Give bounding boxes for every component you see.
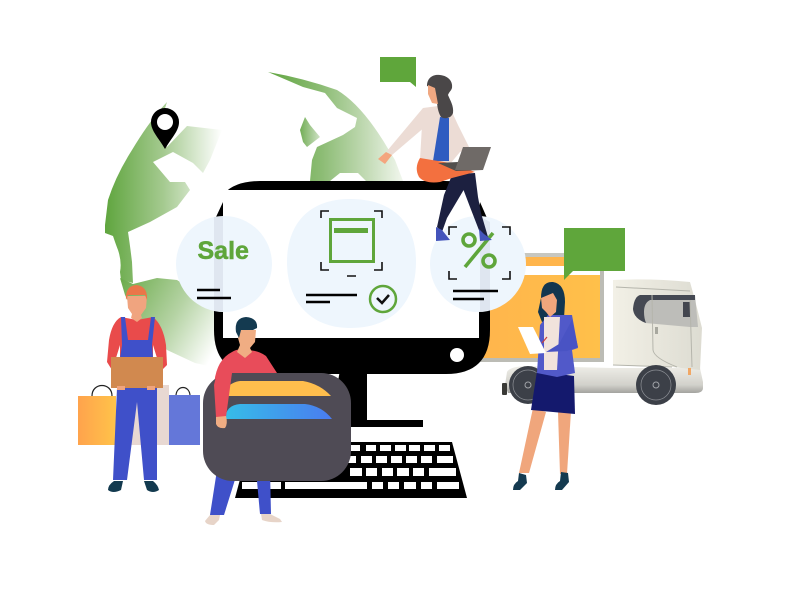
panel: window icon blob: [287, 199, 416, 328]
percent circle background: [430, 216, 526, 312]
delivery truck: [472, 253, 703, 405]
truck: chassis: [505, 366, 703, 393]
left shoe: [513, 473, 527, 490]
box: [111, 357, 163, 388]
globe: lower continent: [120, 278, 222, 369]
globe: island: [300, 117, 320, 147]
hands on box: [117, 386, 155, 390]
right leg: [558, 411, 571, 474]
wallet: blue card: [225, 404, 332, 419]
truck: rear wheel: [509, 366, 547, 404]
jacket: [537, 315, 578, 377]
bag: blue: [169, 388, 200, 445]
shirt: [107, 317, 167, 370]
pen: [542, 337, 547, 343]
keyboard: [235, 442, 467, 498]
left shoe: [205, 515, 220, 525]
monitor: frame: [214, 181, 490, 374]
globe: left continents: [105, 102, 222, 283]
arm over wallet: [214, 368, 232, 417]
keyboard: body: [235, 442, 467, 498]
truck: cargo top strip: [505, 257, 567, 266]
wallet: yellow card: [224, 381, 331, 396]
truck: tail light: [502, 383, 507, 395]
laptop screen: [455, 147, 491, 170]
truck: cargo box: [472, 275, 600, 358]
jacket arm: [546, 320, 578, 352]
globe: [105, 72, 403, 369]
bag: beige: [127, 385, 169, 445]
panel: percent circle: [430, 216, 526, 312]
icon: map pin: [151, 108, 179, 149]
truck: door lines: [613, 287, 692, 367]
legs: [113, 388, 157, 480]
sale circle over monitor edge: [214, 217, 223, 311]
blouse: [544, 317, 560, 370]
legs: [210, 470, 271, 515]
back hair: [538, 282, 565, 322]
speech bubble: top: [380, 57, 416, 87]
left shoe: [436, 227, 450, 241]
truck: window: [633, 295, 698, 327]
arm gaps: [116, 345, 157, 358]
hair: [236, 317, 257, 338]
percent circle over monitor edge: [480, 216, 490, 312]
globe: right continents: [268, 72, 403, 181]
jacket: [420, 106, 469, 164]
panel: sale circle: [176, 216, 272, 312]
hair: [427, 75, 453, 118]
truck: window dark frame: [633, 295, 695, 323]
right leg: [458, 173, 488, 238]
right shoe: [555, 472, 569, 490]
left shoe: [108, 481, 123, 492]
woman with document: [513, 282, 578, 490]
face: [428, 85, 438, 104]
sale circle background: [176, 216, 272, 312]
sale label: Sale: [198, 237, 249, 265]
left leg: [519, 408, 546, 473]
truck: mirror: [683, 302, 690, 317]
laptop base: [438, 162, 483, 171]
top: [433, 117, 449, 161]
icon: browser window: [330, 220, 374, 262]
blob background: [287, 199, 416, 328]
head: [127, 296, 147, 322]
monitor: upper right cut: [458, 178, 492, 218]
bag: orange: [78, 386, 116, 445]
monitor: stand: [330, 370, 423, 427]
icon: focus brackets: [321, 211, 382, 276]
skirt: [417, 158, 475, 182]
monitor: cut corner: [212, 179, 238, 217]
icon: percent sign: [463, 233, 495, 267]
icon: focus brackets: [449, 227, 510, 279]
text lines: [306, 295, 357, 302]
hand: [378, 152, 392, 164]
right shoe: [479, 229, 492, 241]
icon: check badge: [370, 286, 396, 312]
monitor: power button: [450, 348, 464, 362]
wallet: [203, 373, 351, 481]
left arm: [387, 108, 433, 155]
shirt: [214, 349, 277, 417]
woman sitting with laptop: [378, 75, 492, 241]
speech bubble: truck: [564, 228, 625, 280]
monitor: screen: [223, 190, 479, 338]
overalls: [120, 317, 155, 358]
sale text lines: [197, 290, 231, 298]
right shoe: [144, 481, 159, 492]
computer monitor: [212, 178, 492, 427]
truck: door handle: [655, 327, 658, 334]
document: [518, 327, 546, 354]
right shoe: [261, 514, 282, 522]
hair: [126, 285, 147, 300]
man holding wallet: [203, 317, 351, 525]
text lines: [453, 291, 498, 299]
truck: cargo frame: [472, 253, 604, 362]
hand: [216, 416, 227, 428]
truck: cab: [613, 279, 702, 370]
truck: cargo frame top: [505, 253, 604, 257]
skirt: [531, 371, 575, 414]
truck: side light: [688, 368, 691, 375]
neck and face: [237, 330, 256, 358]
face: [541, 293, 557, 317]
keyboard: keys: [242, 445, 459, 489]
left leg: [437, 175, 466, 232]
truck: front wheel: [636, 365, 676, 405]
man with box and shopping bags: [78, 285, 200, 492]
